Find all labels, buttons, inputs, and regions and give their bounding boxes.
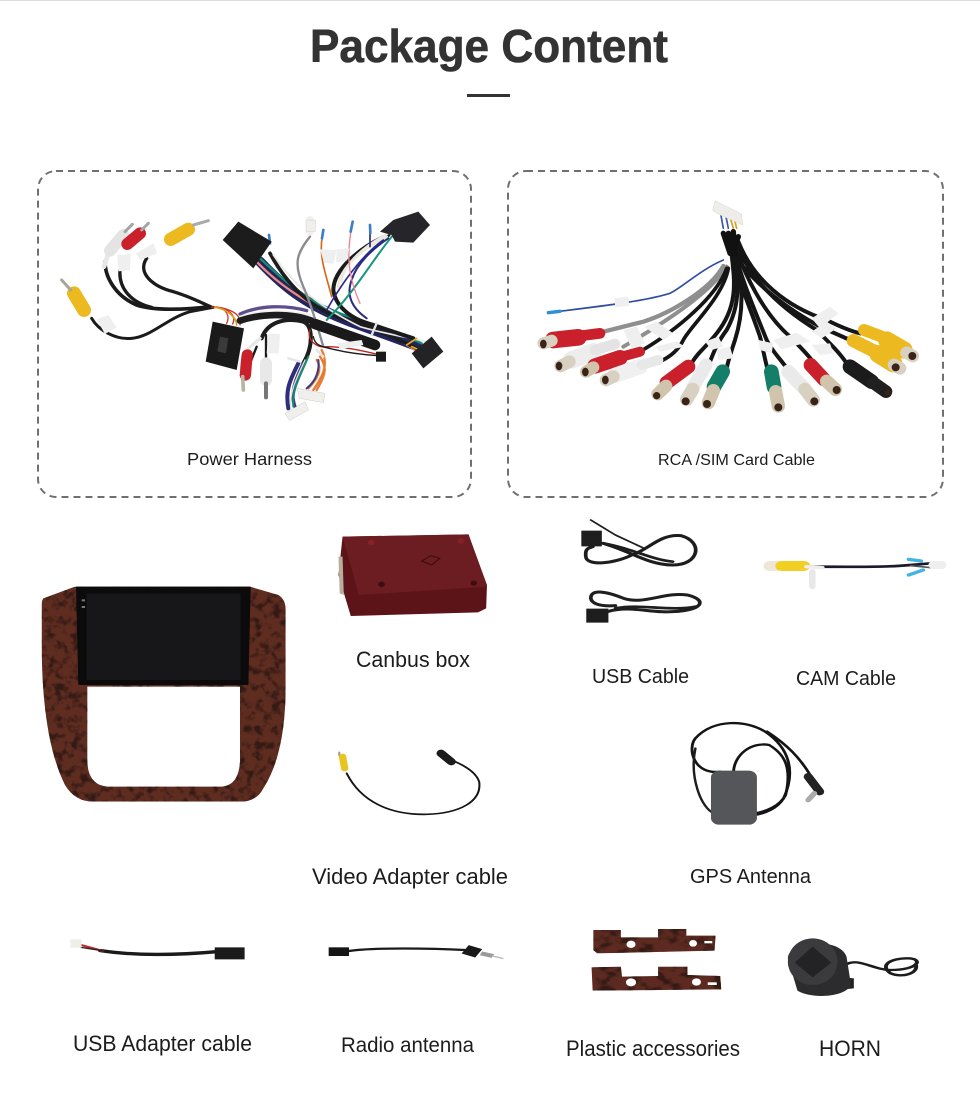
white multi-pin plug (713, 201, 743, 225)
black connector: top right (380, 212, 430, 243)
illustration: power harness wiring (62, 212, 443, 421)
icon: usb cable lower (587, 592, 700, 622)
icon: canbus box (338, 534, 487, 616)
label: Canbus box: Canbus box (356, 647, 470, 672)
item group: canbus box, usb, cam, video adapter, gps (338, 520, 942, 825)
illustration: rca cable fan-out (540, 201, 916, 411)
title: Package Content (310, 20, 668, 72)
tags on rca leads (614, 297, 838, 360)
white terminal blocks (285, 220, 325, 421)
small black plug (376, 352, 386, 362)
wood trim bezel (40, 585, 288, 803)
label: Video Adapter cable: Video Adapter cable (312, 864, 508, 889)
panel: power harness (38, 171, 471, 497)
label: GPS Antenna: GPS Antenna (690, 866, 812, 888)
item: head unit with wood bezel (40, 585, 288, 803)
label: CAM Cable: CAM Cable (796, 667, 896, 690)
black connector: top (223, 222, 272, 268)
icon: cam cable (770, 559, 942, 587)
icon: usb adapter cable (70, 939, 245, 954)
label: Power Harness: Power Harness (187, 449, 312, 469)
black connector: lower left (206, 322, 244, 370)
icon: plastic accessories (589, 927, 724, 992)
touch screen (76, 587, 251, 685)
icon: usb cable upper (582, 520, 696, 565)
icon: gps antenna (692, 723, 820, 825)
rca socket holes (540, 340, 916, 411)
icon: horn speaker (788, 938, 917, 996)
label: Plastic accessories: Plastic accessories (566, 1036, 740, 1061)
icon: radio antenna (329, 947, 502, 958)
label: RCA /SIM Card Cable: RCA /SIM Card Cable (658, 452, 815, 469)
panel: rca sim card cable (508, 171, 943, 497)
item group: bottom row accessories (70, 927, 917, 996)
title underline (467, 94, 510, 97)
label: USB Cable: USB Cable (592, 665, 689, 688)
wire tags (97, 243, 363, 353)
label: USB Adapter cable: USB Adapter cable (73, 1031, 252, 1056)
icon: video adapter cable (339, 752, 479, 814)
label: Radio antenna: Radio antenna (341, 1033, 474, 1057)
black connector: bottom right (412, 337, 443, 368)
label: HORN: HORN (819, 1036, 881, 1061)
